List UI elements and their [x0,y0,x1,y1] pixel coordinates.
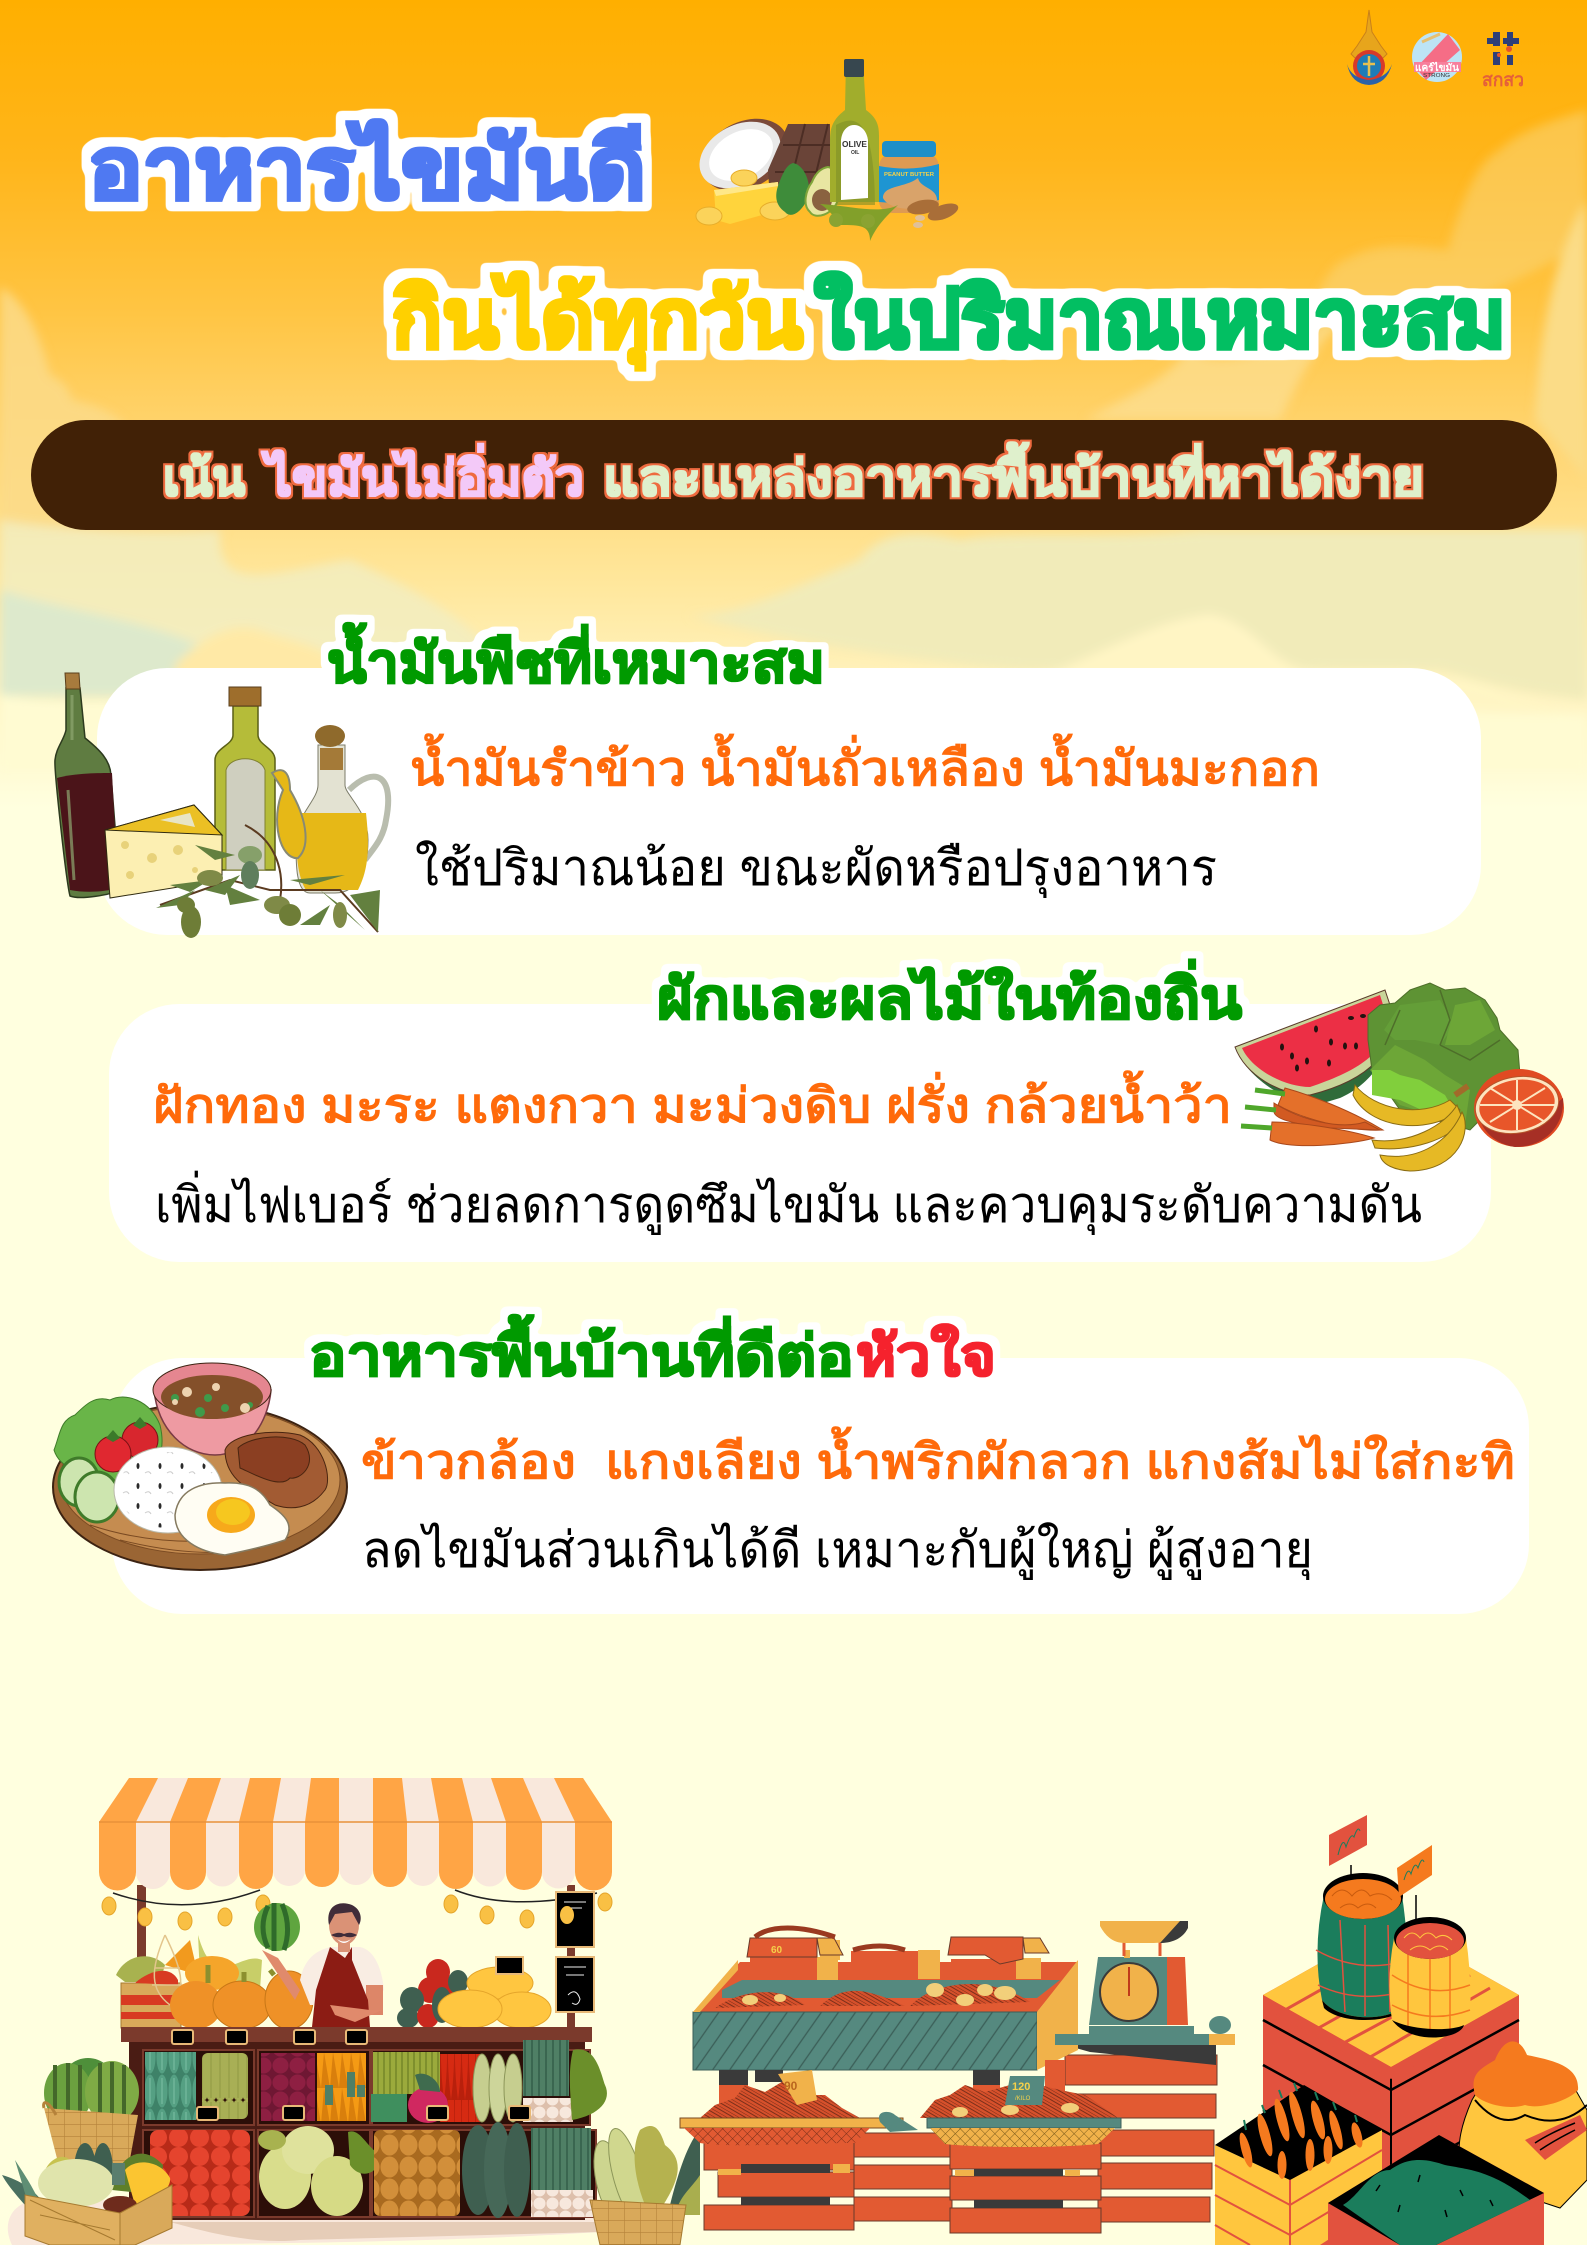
grain sack [1459,2041,1587,2208]
vendor [254,1903,384,2027]
foreground crate with vegetables [2,2143,172,2245]
right basket of vegetables [588,2125,700,2245]
striped awning [99,1778,612,1891]
greens crate [1328,2135,1544,2245]
local food advice: ลดไขมันส่วนเกินได้ดี เหมาะกับผู้ใหญ่ ผู้สูงอายุ [362,1522,1313,1580]
fish display case [693,1960,1078,2070]
oil carafe [272,725,388,893]
icon: fruit and vegetables [1235,983,1564,1171]
olive branch [156,825,380,938]
olive oil bottle [830,59,879,205]
logos top right [1347,10,1524,91]
butter [696,170,790,225]
brown cake with sauce [225,1432,328,1508]
coconut [688,104,801,206]
wooden plate [53,1404,347,1570]
chalkboard signs [556,1892,594,2012]
produce heading: ผักและผลไม้ในท้องถิ่น [657,959,1242,1030]
rice [114,1447,222,1533]
carrots [1241,1088,1383,1146]
bananas [1353,1085,1468,1171]
avocado [776,163,839,216]
title line 2 [392,272,1506,370]
banner text [163,442,1424,506]
title line 2: in suitable amount: ในปริมาณเหมาะสม [814,272,1506,365]
olive oil bottle: OLIVE [842,140,868,149]
soup bowl [153,1363,271,1455]
panel: local vegetables and fruit [109,959,1564,1262]
crates and posts [704,2060,1101,2233]
olive oil bottle: OIL [851,150,859,156]
peanut butter jar [879,141,939,213]
local food heading [309,1315,996,1387]
watermelon basket [44,2058,139,2170]
logo: TSRI: สกสว [1482,70,1524,91]
oils list: น้ำมันรำข้าว น้ำมันถั่วเหลือง น้ำมันมะกอก [410,733,1320,796]
watermelon [1235,990,1392,1104]
fish baskets: 90 [784,2079,798,2093]
logo: royal seal [1347,10,1392,85]
title line 2: eat every day: กินได้ทุกวัน [392,272,803,370]
fish baskets: /KILO [1015,2096,1031,2102]
panel: vegetable oils [55,623,1481,938]
tomatoes [95,1417,158,1472]
peanut butter jar: PEANUT BUTTER [884,172,934,178]
lettuce [54,1397,162,1480]
produce list: ฝักทอง มะระ แตงกวา มะม่วงดิบ ฝรั่ง กล้วยน้ำว้า [153,1070,1232,1133]
pumpkins and crate [116,1935,313,2029]
logo: project badge: แคร์ไขมัน [1415,61,1459,74]
cardboard boxes: 60 [771,1945,783,1956]
yellow barrel [1389,1845,1470,2038]
icon: healthy fats food group [688,59,960,241]
logo: project badge: STRONG [1423,73,1450,79]
wine bottle [55,673,120,897]
peanuts and olive sprig [820,197,960,241]
fried egg [175,1483,289,1555]
carrot crate [1215,2083,1382,2245]
title line 1: อาหารไขมันดี [88,120,646,217]
logo: TSRI [1482,32,1524,91]
green barrel [1316,1815,1408,2020]
illustration: fish market stand [680,1921,1235,2233]
cardboard boxes [747,1928,1049,1980]
logo: project badge [1412,32,1462,82]
banner pill [31,420,1557,530]
hanging lights [102,1890,612,1930]
banner text: เน้น [163,452,245,506]
olive oil bottle [215,687,275,870]
cheese wedge [105,805,222,898]
icon: Thai meal plate [53,1363,347,1570]
upper row vegetables [145,2040,607,2123]
banner text: และแหล่งอาหารพื้นบ้านที่หาได้ง่าย [603,442,1424,506]
price tags [172,2030,530,2120]
chocolate [768,124,830,200]
oils heading: น้ำมันพืชที่เหมาะสม [327,623,825,694]
crates behind [854,2055,1217,2222]
illustration: market stall with vendor [2,1778,700,2245]
produce card [109,1004,1491,1262]
cucumber slices [59,1458,119,1522]
icon: oil bottles and cheese [55,673,388,938]
lower row vegetables [150,2122,593,2218]
produce shelf [121,2027,607,2220]
lettuce [1368,983,1520,1130]
panel: local heart healthy food [53,1315,1529,1614]
peppers and melons [397,1957,551,2028]
illustration: isometric produce boxes [1215,1815,1587,2245]
fish baskets [680,2070,1121,2147]
heading red part: หัวใจ [856,1323,996,1387]
local food list: ข้าวกล้อง แกงเลียง น้ำพริกผักลวก แกงส้มไม่ใส่กะทิ [361,1426,1515,1489]
posts [137,1885,575,2030]
local food card [112,1358,1529,1614]
banner text: ไขมันไม่อิ่มตัว [261,443,584,506]
oils advice: ใช้ปริมาณน้อย ขณะผัดหรือปรุงอาหาร [415,840,1217,898]
banner: emphasis [31,420,1557,530]
heading green part: อาหารพื้นบ้านที่ดีต่อ [309,1315,854,1387]
hanging scale [1055,1921,1235,2045]
stacked red crates [1263,1923,1519,2245]
ground shadow [8,2200,600,2245]
background clouds [0,110,1587,770]
blood orange [1471,1069,1564,1147]
oils card [97,668,1481,935]
produce advice: เพิ่มไฟเบอร์ ช่วยลดการดูดซึมไขมัน และควบคุมระดับความดัน [155,1171,1422,1235]
fish baskets: 120 [1012,2081,1030,2093]
